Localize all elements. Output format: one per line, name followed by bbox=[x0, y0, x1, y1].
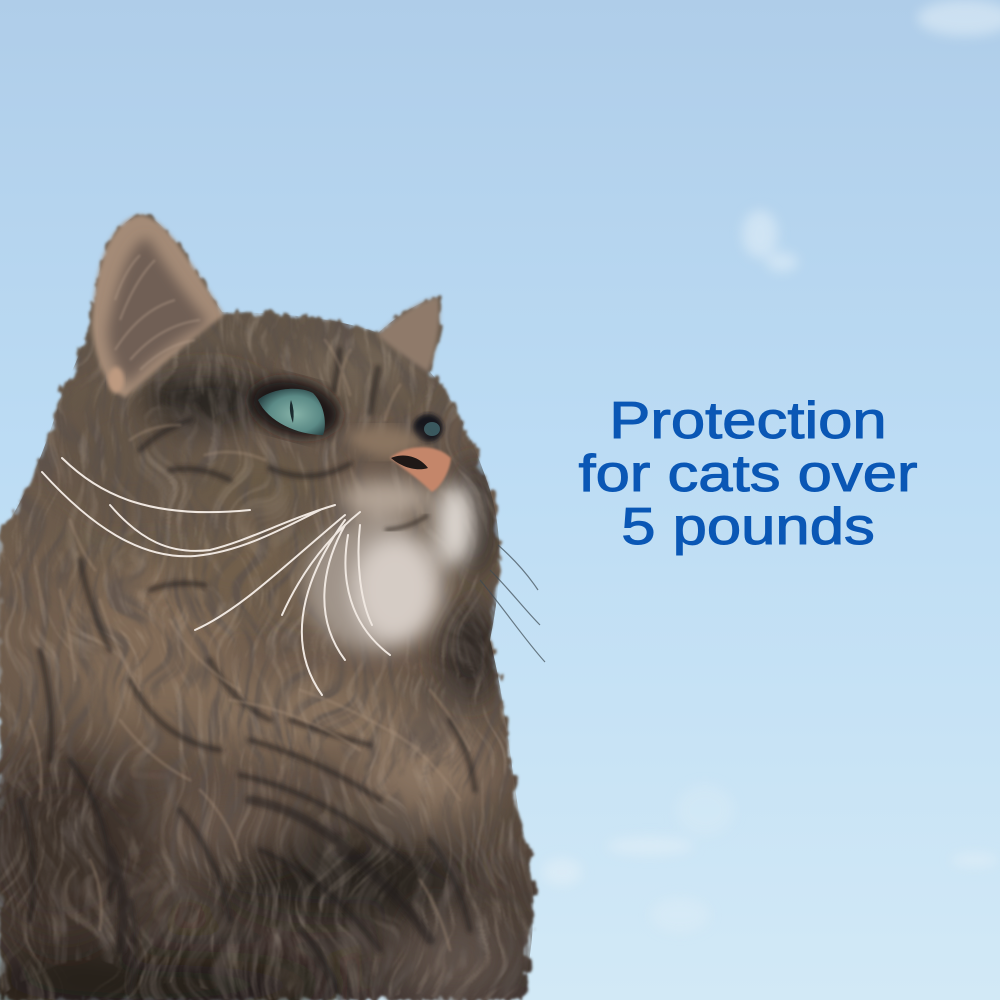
cat bbox=[0, 200, 560, 1000]
headline text: 5 pounds bbox=[621, 498, 875, 556]
head shading bbox=[60, 335, 502, 702]
light brow and nose bridge bbox=[345, 426, 425, 458]
fur shading bbox=[0, 520, 510, 1000]
dark fur strands bbox=[20, 350, 475, 1000]
fur texture light bbox=[0, 298, 533, 1000]
eye socket bbox=[243, 369, 347, 447]
right eye bbox=[413, 414, 443, 442]
clouds bbox=[542, 0, 1000, 933]
iris bbox=[258, 389, 325, 435]
left ear bbox=[92, 215, 224, 398]
cat body silhouette bbox=[0, 215, 533, 1000]
ear outer bbox=[92, 215, 224, 398]
mouth line bbox=[385, 515, 428, 530]
pupil bbox=[290, 400, 294, 423]
headline text: Protection bbox=[609, 392, 887, 450]
fur texture dark bbox=[0, 200, 560, 1000]
left eye bbox=[243, 369, 347, 447]
right ear bbox=[378, 298, 439, 372]
headline text bbox=[578, 392, 918, 556]
ear inner shading bbox=[108, 238, 208, 385]
nose bbox=[390, 447, 451, 492]
dark right-side whiskers bbox=[480, 545, 545, 662]
whiskers bbox=[42, 458, 390, 695]
muzzle and chin bbox=[305, 480, 475, 653]
ear hair strands bbox=[115, 255, 200, 370]
ear base highlight bbox=[108, 367, 124, 393]
light fur strands bbox=[30, 340, 470, 950]
headline text: for cats over bbox=[578, 445, 918, 503]
